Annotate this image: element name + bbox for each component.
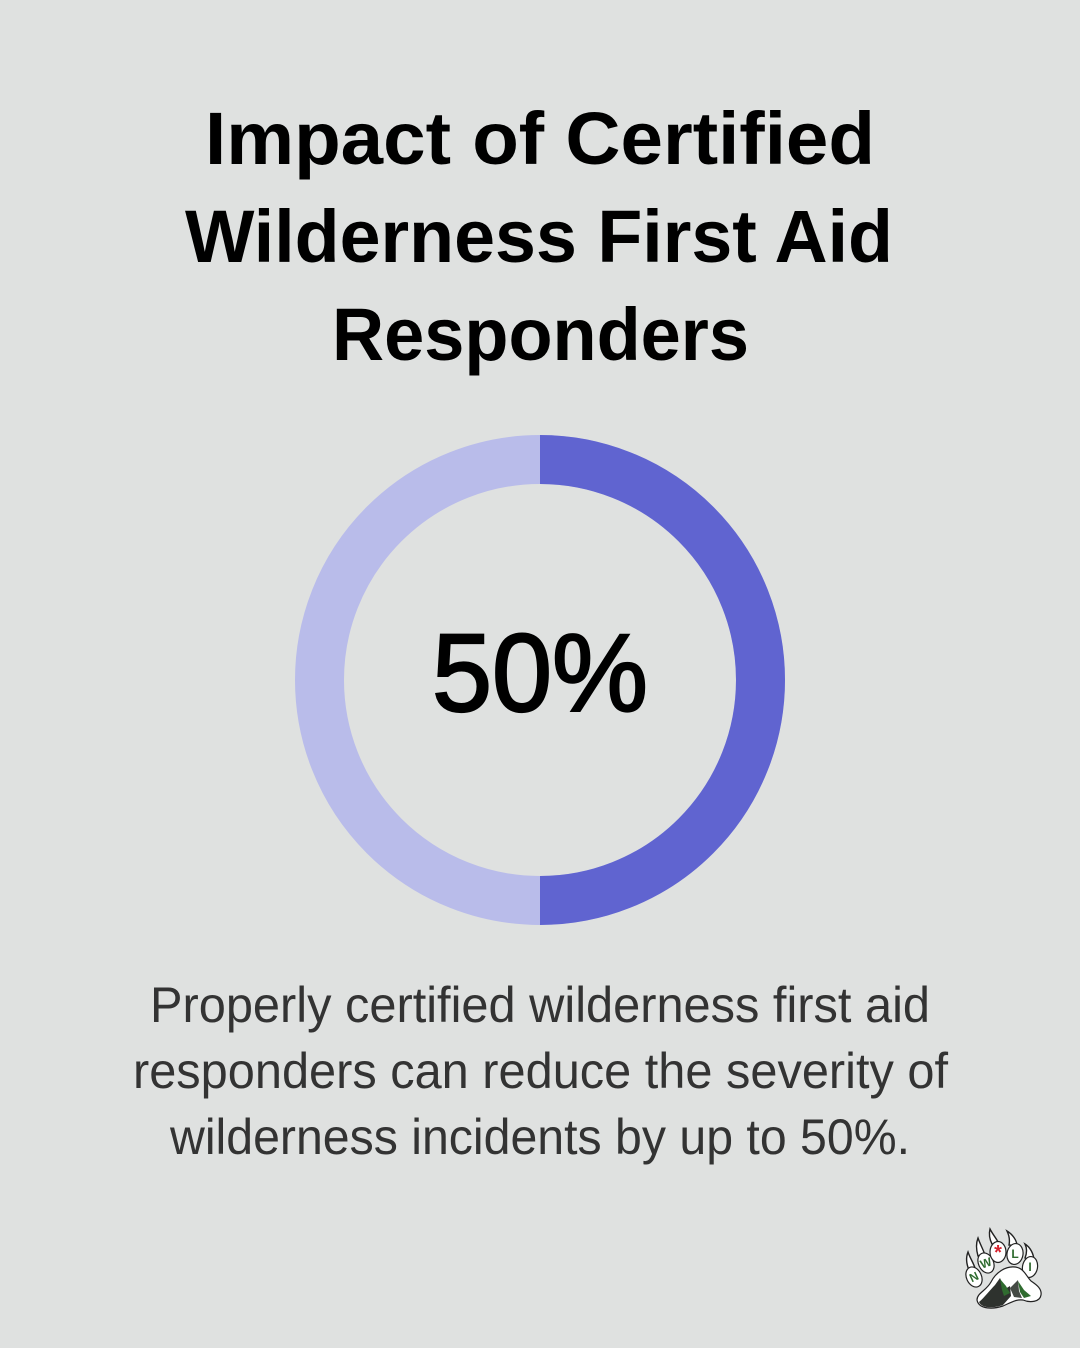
icon: NWLI bear paw logo: N (967, 1269, 981, 1285)
title (185, 97, 893, 376)
claws (967, 1229, 1034, 1270)
pad (977, 1267, 1041, 1308)
icon: NWLI bear paw logo (963, 1229, 1041, 1308)
title: Responders (332, 293, 749, 376)
description text: responders can reduce the severity of (133, 1043, 948, 1099)
icon: NWLI bear paw logo: W (978, 1254, 994, 1272)
title: Wilderness First Aid (185, 195, 893, 278)
icon: NWLI bear paw logo: I (1028, 1260, 1032, 1274)
description text (133, 977, 948, 1165)
toes with letters (963, 1242, 1039, 1290)
mountains (979, 1278, 1011, 1307)
center value: 50% (432, 612, 648, 735)
description text: Properly certified wilderness first aid (150, 977, 930, 1033)
icon: NWLI bear paw logo: * (994, 1242, 1002, 1264)
icon: NWLI bear paw logo: L (1011, 1247, 1019, 1261)
donut chart: 50% (320, 460, 760, 900)
description text: wilderness incidents by up to 50%. (169, 1109, 910, 1165)
title: Impact of Certified (205, 97, 875, 180)
